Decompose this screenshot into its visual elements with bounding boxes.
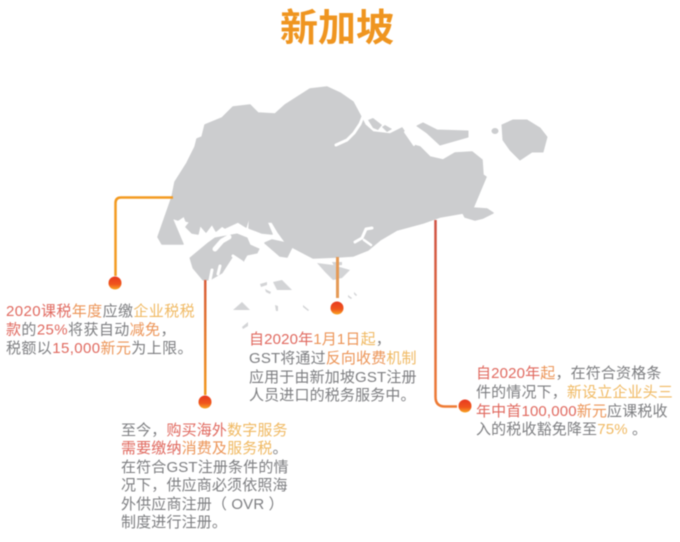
- text: digital services GST: [121, 422, 289, 531]
- text: corporate tax rebate: 税额以15,000新元为上限。: [6, 340, 193, 357]
- text: digital services GST: 况下，供应商必须依照海: [121, 476, 288, 494]
- connector: reverse charge: [330, 257, 344, 314]
- text: corporate tax rebate: 2020课税年度应缴企业税税: [6, 302, 195, 320]
- Pulau Tekong: [502, 120, 547, 160]
- text: reverse charge: GST将通过反向收费机制: [249, 350, 417, 367]
- text: digital services GST: 制度进行注册。: [121, 514, 227, 531]
- white channels: [210, 114, 414, 280]
- connector: digital services: [198, 280, 212, 408]
- text: digital services GST: 需要缴纳消费及服务税。: [121, 440, 288, 457]
- text: reverse charge: 自2020年1月1日起，: [249, 331, 391, 348]
- small northern islets: [368, 118, 498, 134]
- text: reverse charge: 人员进口的税务服务中。: [249, 387, 416, 404]
- connector: corporate tax: [108, 198, 173, 290]
- main island: [158, 87, 493, 258]
- text: start-up exemption: [476, 365, 673, 438]
- Sentosa and southern islands: [233, 262, 357, 329]
- text: reverse charge: 应用于由新加坡GST注册: [249, 368, 417, 386]
- text: corporate tax rebate: [6, 302, 195, 357]
- title: 新加坡: [280, 8, 394, 50]
- Jurong Island: [190, 234, 259, 280]
- text: digital services GST: 在符合GST注册条件的情: [121, 459, 289, 476]
- text: start-up exemption: 年中首100,000新元应课税收: [476, 402, 668, 420]
- text: start-up exemption: 自2020年起，在符合资格条: [476, 365, 662, 382]
- text: start-up exemption: 入的税收豁免降至75% 。: [476, 421, 647, 438]
- text: reverse charge: [249, 331, 417, 404]
- text: digital services GST: 外供应商注册（ OVR ）: [121, 495, 284, 513]
- text: digital services GST: 至今，购买海外数字服务: [121, 422, 288, 439]
- text: start-up exemption: 件的情况下，新设立企业头三: [476, 383, 673, 401]
- text: corporate tax rebate: 款的25%将获自动减免，: [6, 322, 176, 338]
- map: Singapore: [158, 87, 547, 329]
- Pulau Ubin: [417, 123, 468, 145]
- connector: start-up exemption: [436, 220, 472, 412]
